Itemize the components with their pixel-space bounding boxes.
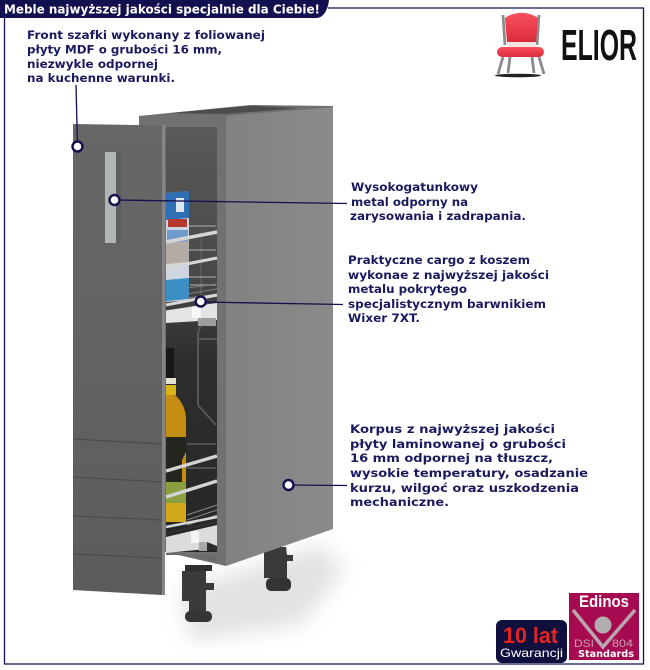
door panel: [73, 124, 162, 595]
badge: Edinos standards: [569, 592, 639, 660]
floor shadow: [180, 545, 345, 640]
carcass side panel: [226, 107, 333, 566]
leader lines: [76, 85, 347, 486]
badge: 10 years warranty: 10 lat: [503, 623, 559, 648]
text: cargo description: [348, 253, 549, 325]
text: body description: Korpus z najwyższej jakości: [350, 422, 555, 436]
door seams: [73, 439, 162, 558]
text: cargo description: Wixer 7XT.: [348, 311, 420, 325]
icon: foot front: [182, 565, 214, 622]
icon: handle: [105, 152, 121, 243]
logo: Elior: [495, 13, 637, 77]
rear rail: [198, 230, 216, 425]
text: cargo description: metalu pokrytego: [348, 282, 467, 296]
badge: Edinos standards: 804: [612, 638, 633, 650]
badge: 10 years warranty: Gwarancji: [500, 646, 563, 660]
door edge: [162, 125, 165, 595]
badge: 10 years warranty: [496, 620, 567, 663]
icon: red chair: [495, 13, 544, 77]
text: front description: na kuchenne warunki.: [27, 71, 175, 85]
badge: Edinos standards: Standards: [578, 649, 634, 660]
carcass top: [139, 105, 333, 118]
text: metal description: Wysokogatunkowy: [351, 180, 479, 194]
cabinet illustration: [73, 105, 333, 622]
text: front description: Front szafki wykonany z foliowanej: [27, 28, 265, 42]
basket upper: [166, 226, 217, 326]
carcass front frame: [139, 116, 226, 566]
product: milk carton: [166, 191, 189, 302]
text: metal description: [350, 180, 526, 223]
icon: foot rear: [264, 547, 293, 591]
text: front description: niezwykle odpornej: [27, 57, 158, 71]
text: body description: płyty laminowanej o grubości: [350, 437, 566, 451]
text: body description: 16 mm odpornej na tłuszcz,: [350, 451, 553, 465]
text: cargo description: specjalistycznym barwnikiem: [348, 297, 546, 311]
text: cargo description: Praktyczne cargo z koszem: [348, 253, 530, 267]
interior: [166, 127, 217, 552]
text: body description: wysokie temperatury, osadzanie: [350, 466, 588, 480]
text: body description: mechaniczne.: [350, 495, 449, 509]
basket lower: [166, 444, 217, 553]
text: cargo description: wykonae z najwyższej jakości: [348, 268, 549, 282]
text: body description: [350, 422, 588, 509]
text: front description: płyty MDF o grubości 16 mm,: [27, 42, 222, 56]
header banner: Meble najwyższej jakości specjalnie dla Ciebie!: [4, 2, 320, 16]
badge: Edinos standards: Edinos: [579, 592, 629, 611]
text: body description: kurzu, wilgoć oraz uszkodzenia: [350, 481, 579, 495]
badge: Edinos standards: DSI: [574, 638, 594, 650]
callout dots: [72, 142, 294, 490]
product: bottle: [166, 348, 186, 522]
text: metal description: zarysowania i zadrapania.: [350, 209, 526, 223]
text: front description: [27, 28, 265, 85]
text: metal description: metal odporny na: [351, 195, 468, 209]
